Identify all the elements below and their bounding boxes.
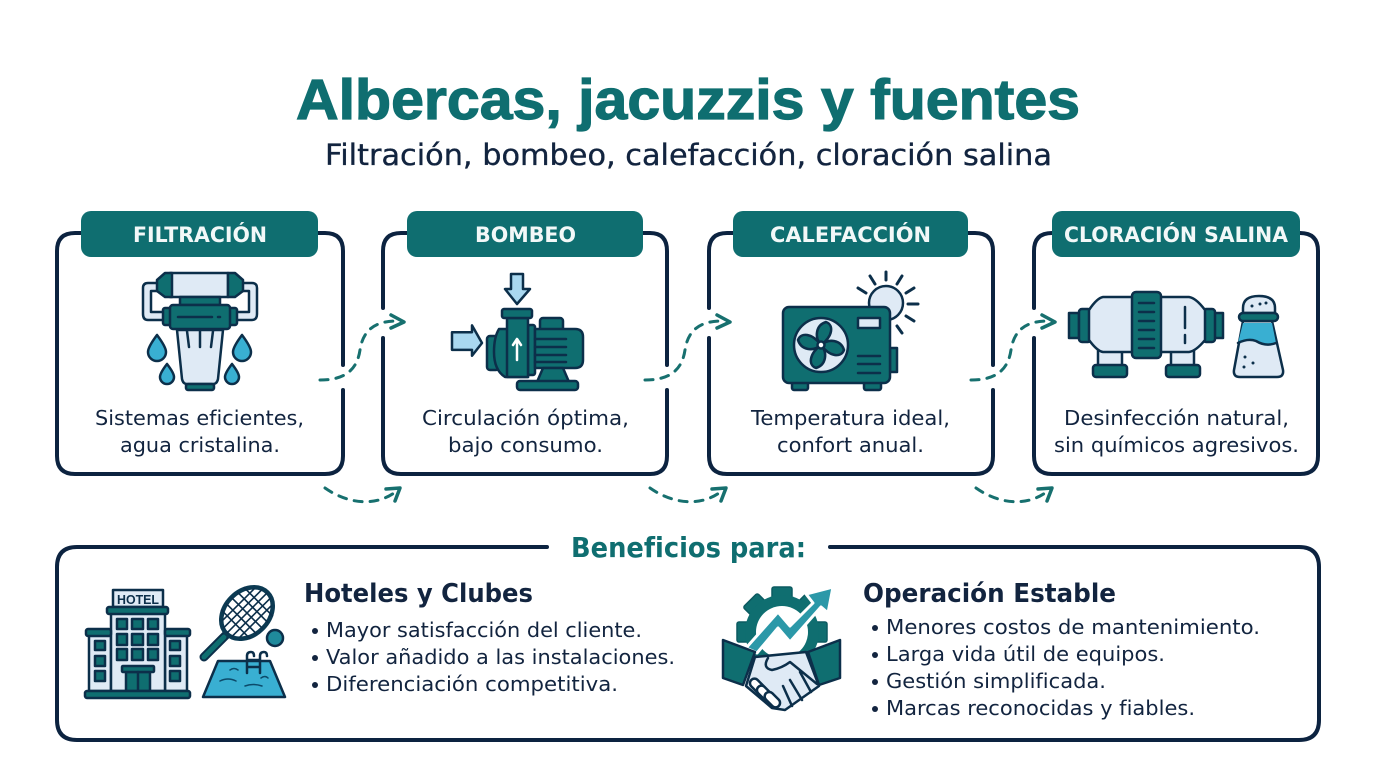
list: hoteles y clubes: Diferenciación competitiva. [326,672,618,696]
icon: hotel [85,590,190,698]
heading: calefacción [733,211,968,257]
arrow: lower calefacción to cloración [976,488,1052,502]
text: calefacción: confort anual. [777,433,924,457]
text: bombeo: bajo consumo. [448,433,603,457]
list: operación estable: Larga vida útil de equipos. [886,642,1165,666]
heading: beneficios para: Beneficios para: [571,531,806,564]
list: hoteles y clubes [312,618,675,696]
icon: gear, growth arrow and handshake [723,587,840,710]
list: hoteles y clubes: Mayor satisfacción del cliente. [326,618,642,642]
list: hoteles y clubes: Valor añadido a las instalaciones. [326,645,675,669]
arrow: filtración to bombeo [320,315,404,380]
heading: bombeo [407,211,643,257]
icon: water pump [452,274,583,390]
icon: hotel: HOTEL [117,592,159,607]
icon: tennis racket, ball and pool [203,577,285,697]
text: cloración salina [1054,406,1299,457]
list: operación estable: Menores costos de mantenimiento. [886,615,1260,639]
heading: operación estable: Operación Estable [863,579,1116,609]
text: bombeo [422,406,629,457]
panel: beneficios [57,531,1319,740]
icon: salt chlorinator and shaker [1069,292,1283,377]
list: operación estable: Marcas reconocidas y fiables. [886,696,1195,720]
heading: filtración [81,211,318,257]
panel: filtración [57,211,343,474]
heading: cloración salina [1052,211,1300,257]
heading: filtración: FILTRACIÓN [133,222,267,247]
icon: water filter [143,273,257,390]
icon: heat pump with sun [783,272,918,390]
heading: cloración salina: CLORACIÓN SALINA [1064,222,1289,247]
text: filtración: agua cristalina. [120,433,280,457]
arrow: lower bombeo to calefacción [650,488,726,502]
panel: cloración salina [1034,211,1318,474]
text: calefacción: Temperatura ideal, [750,406,950,430]
arrow: calefacción to cloración [971,315,1055,380]
panel: calefacción [709,211,993,474]
text: cloración salina: Desinfección natural, [1064,406,1289,430]
heading: calefacción: CALEFACCIÓN [770,222,931,247]
title: Albercas, jacuzzis y fuentes [296,68,1080,132]
list: operación estable: Gestión simplificada. [886,669,1106,693]
text: filtración: Sistemas eficientes, [95,406,304,430]
text: cloración salina: sin químicos agresivos. [1054,433,1299,457]
text: filtración [95,406,304,457]
arrow: bombeo to calefacción [645,315,730,380]
arrow: lower filtración to bombeo [325,488,400,502]
heading: hoteles y clubes: Hoteles y Clubes [304,579,533,609]
panel: bombeo [383,211,667,474]
text: bombeo: Circulación óptima, [422,406,629,430]
heading: bombeo: BOMBEO [475,223,576,247]
list: operación estable [872,615,1260,720]
text: calefacción [750,406,950,457]
subtitle: Filtración, bombeo, calefacción, cloración salina [325,138,1052,172]
